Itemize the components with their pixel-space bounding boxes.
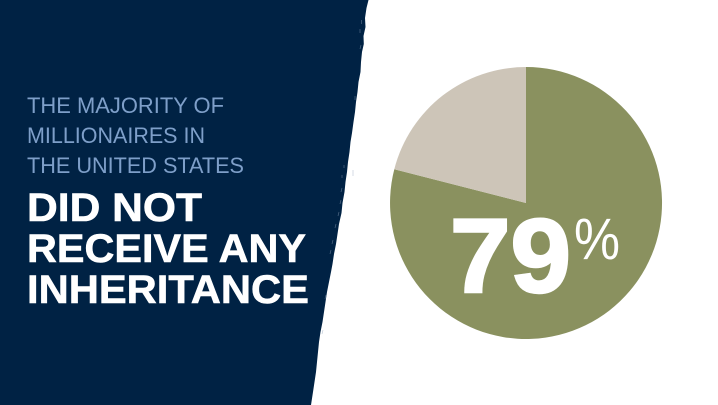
intro text block [27,93,244,178]
intro line 3: THE UNITED STATES [27,153,244,178]
pie slice: 21 percent [394,67,526,203]
headline text block [27,186,309,312]
headline line 3: INHERITANCE [27,268,309,312]
pie value label [450,198,620,315]
intro line 1: THE MAJORITY OF [27,93,224,118]
percent sign: % [574,207,620,272]
pie slice: 79 percent [390,67,662,339]
intro line 2: MILLIONAIRES IN [27,123,205,148]
panel: navy brushed left panel [0,0,368,405]
headline line 2: RECEIVE ANY [27,227,306,271]
pie chart [390,67,662,339]
headline line 1: DID NOT [27,186,202,230]
value: 79: 79 [450,198,571,315]
